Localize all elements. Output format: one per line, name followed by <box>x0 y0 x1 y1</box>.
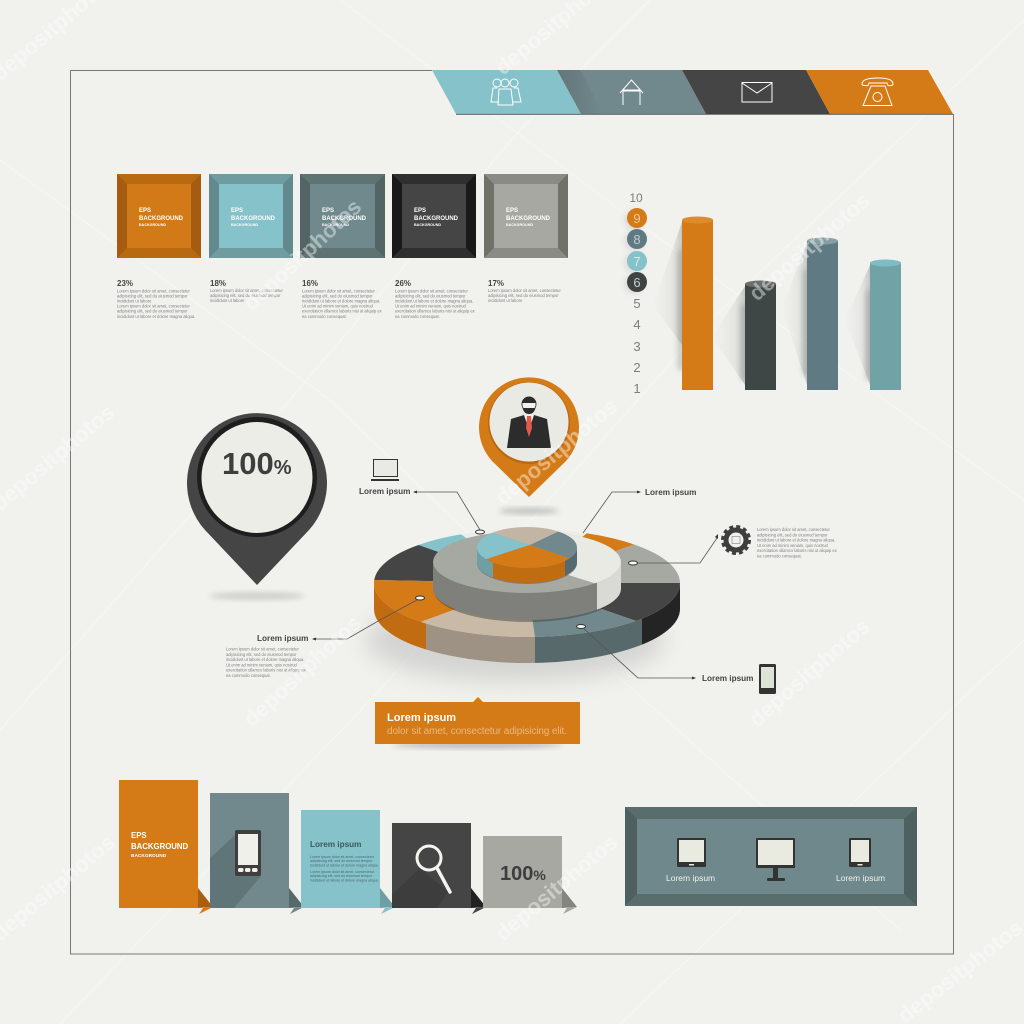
callout: gear: Ut enim ad minim veniam, quis nostrud <box>757 543 828 548</box>
box orange: BACKGROUND <box>139 223 166 227</box>
frame outline <box>70 70 954 954</box>
box orange: BACKGROUND <box>139 216 184 222</box>
callout: gear: adipisicing elit, sed do eiusmod tempor <box>757 532 828 537</box>
box orange <box>117 174 201 258</box>
box gray: BACKGROUND <box>506 223 533 227</box>
caption 26%: exercitation ullamco laboris nisi ut aliquip ex <box>395 308 475 314</box>
ribbon orange: EPS <box>131 831 147 840</box>
caption 16%: adipisicing elit, sed do eiusmod tempor <box>302 294 373 298</box>
axis scale: 10 <box>629 191 643 205</box>
caption 23% <box>117 279 195 319</box>
axis scale: 9 <box>633 211 641 226</box>
icon: magnifier <box>417 846 450 892</box>
box dark: BACKGROUND <box>414 223 441 227</box>
caption 16%: incididunt ut labore et dolore magna aliqua. <box>302 298 380 304</box>
bar teal <box>845 260 901 390</box>
caption 17%: incididunt ut labore <box>488 298 523 303</box>
middle ring <box>433 533 621 622</box>
box orange: EPS <box>139 208 151 214</box>
caption 23%: incididunt ut labore <box>117 298 152 304</box>
ribbon teal: adipisicing elit, sed do eiusmod tempor <box>310 874 373 878</box>
banner: Lorem ipsum <box>387 712 456 724</box>
caption 17%: 17% <box>488 279 504 288</box>
caption 17%: Lorem ipsum dolor sit amet, consectetur <box>488 288 561 293</box>
caption 18% <box>210 279 283 303</box>
ribbon teal: incididunt ut labore et dolore magna aliqua. <box>310 864 379 868</box>
pin: 100% <box>187 413 327 600</box>
box slate: EPS <box>322 208 334 214</box>
bar orange <box>653 216 713 390</box>
ribbon slate <box>210 793 304 914</box>
box slate <box>300 174 385 258</box>
callout: phone <box>583 628 776 694</box>
caption 23%: incididunt ut labore et dolore magna aliqua. <box>117 314 195 319</box>
caption 26%: 26% <box>395 279 411 288</box>
box teal <box>209 174 293 258</box>
callout dots <box>416 530 638 628</box>
box slate: BACKGROUND <box>322 223 349 227</box>
caption 26%: incididunt ut labore et dolore magna aliqua. <box>395 298 473 304</box>
bar dark <box>712 280 776 390</box>
caption 26% <box>395 279 475 319</box>
panel: percentage captions <box>117 279 561 319</box>
axis scale: 8 <box>633 232 641 247</box>
icon: smartphone <box>235 830 261 876</box>
watermarks: depositphotos <box>744 613 875 732</box>
axis scale: 1 <box>633 381 641 396</box>
pin: person <box>479 377 579 514</box>
bar slate <box>782 238 838 390</box>
caption 17% <box>488 279 561 303</box>
icon: portrait tablet <box>849 838 871 867</box>
caption 26%: adipisicing elit, sed do eiusmod tempor <box>395 294 466 298</box>
watermarks: depositphotos <box>490 393 622 510</box>
caption 23%: Lorem ipsum dolor sit amet, consectetur <box>117 288 190 294</box>
watermarks: depositphotos <box>238 610 366 732</box>
ribbon orange <box>119 780 213 914</box>
box dark <box>392 174 476 258</box>
axis scale: 6 <box>633 275 641 290</box>
axis scale: 3 <box>633 339 641 354</box>
caption 23%: adipisicing elit, sed do eiusmod tempor <box>117 294 188 298</box>
banner <box>375 697 580 748</box>
watermarks: depositphotos <box>238 194 366 316</box>
panel: bevel boxes <box>117 174 568 258</box>
ribbon teal: Lorem ipsum dolor sit amet, consectetur <box>310 870 375 874</box>
caption 18%: Lorem ipsum dolor sit amet, consectetur <box>210 288 283 293</box>
ribbon teal: Lorem ipsum dolor sit amet, consectetur <box>310 855 375 859</box>
panel: devices: Lorem ipsum <box>666 873 715 883</box>
ribbon gray: 100% <box>500 863 546 885</box>
panel: devices <box>625 807 917 906</box>
icon: landscape tablet <box>677 838 706 867</box>
icon: gear <box>722 526 750 554</box>
pie chart <box>362 527 680 689</box>
callout: left: exercitation ullamco laboris nisi ut aliquip ex <box>226 668 306 672</box>
callout: laptop: Lorem ipsum <box>359 487 410 496</box>
axis scale: 2 <box>633 360 641 375</box>
caption 18%: 18% <box>210 279 226 288</box>
caption 26%: Lorem ipsum dolor sit amet, consectetur <box>395 288 468 294</box>
icon: monitor <box>756 838 795 881</box>
callout: left <box>226 600 417 678</box>
callout: gear: incididunt ut labore et dolore magna aliqua. <box>757 538 835 543</box>
top pie <box>477 527 577 584</box>
box teal: EPS <box>231 208 243 214</box>
box teal: BACKGROUND <box>231 216 276 222</box>
caption 23%: 23% <box>117 279 133 288</box>
ribbon teal: incididunt ut labore et dolore magna aliqua. <box>310 878 379 882</box>
caption 16%: ea commodo consequat. <box>302 314 347 319</box>
panel: devices: Lorem ipsum <box>836 873 885 883</box>
caption 23%: adipisicing elit, sed do eiusmod tempor <box>117 308 188 314</box>
box slate: BACKGROUND <box>322 216 367 222</box>
base ring <box>374 533 680 663</box>
caption 16%: exercitation ullamco laboris nisi ut aliquip ex <box>302 308 382 314</box>
callout: left: Ut enim ad minim veniam, quis nostrud <box>226 662 297 667</box>
ribbon orange: BACKGROUND <box>131 842 189 851</box>
callout: gear: Lorem ipsum dolor sit amet, consectetur <box>757 527 830 532</box>
callout: top right: Lorem ipsum <box>645 488 696 497</box>
disc ground shadow <box>365 598 665 682</box>
icon: phone <box>759 664 776 694</box>
caption 26%: ea commodo consequat. <box>395 314 440 319</box>
callout: left: Lorem ipsum <box>257 634 308 643</box>
tab: mail <box>682 70 830 114</box>
box teal: BACKGROUND <box>231 223 258 227</box>
box gray <box>484 174 568 258</box>
tab: people <box>432 70 581 114</box>
caption 16%: Ut enim ad minim veniam, quis nostrud <box>302 304 373 308</box>
ribbon dark <box>392 823 486 914</box>
axis scale: 4 <box>633 317 641 332</box>
caption 18%: adipisicing elit, sed do eiusmod tempor <box>210 293 281 298</box>
caption 17%: adipisicing elit, sed do eiusmod tempor <box>488 293 559 298</box>
icon: businessman <box>507 396 551 448</box>
callout: gear: ea commodo consequat. <box>757 554 802 558</box>
box gray: EPS <box>506 208 518 214</box>
ribbon orange: BACKGROUND <box>131 853 167 859</box>
callout: left: incididunt ut labore et dolore magna aliqua. <box>226 657 304 662</box>
tab: home <box>557 70 706 114</box>
ribbon teal: adipisicing elit, sed do eiusmod tempor <box>310 859 373 863</box>
axis scale: 5 <box>633 296 641 311</box>
icon: laptop <box>371 460 399 481</box>
caption 16%: Lorem ipsum dolor sit amet, consectetur <box>302 288 375 294</box>
box dark: EPS <box>414 208 426 214</box>
caption 23%: Lorem ipsum dolor sit amet, consectetur <box>117 304 190 308</box>
axis scale: 7 <box>633 254 641 269</box>
callout: top right <box>583 488 696 533</box>
watermarks: depositphotos <box>490 829 622 946</box>
callout: left: Lorem ipsum dolor sit amet, consectetur <box>226 646 299 652</box>
callout: gear: exercitation ullamco laboris nisi ut aliquip ex <box>757 548 837 553</box>
axis scale <box>624 191 647 396</box>
callout: gear <box>638 526 837 563</box>
caption 16% <box>302 279 382 319</box>
ribbon teal: Lorem ipsum <box>310 840 361 849</box>
callout: left: ea commodo consequat. <box>226 673 271 678</box>
box gray: BACKGROUND <box>506 216 551 222</box>
caption 16%: 16% <box>302 279 318 288</box>
callout: laptop <box>359 460 480 530</box>
bar chart <box>624 191 901 396</box>
watermarks: depositphotos <box>744 187 875 306</box>
ribbon teal <box>301 810 395 914</box>
tab: telephone <box>806 70 953 114</box>
panel: ribbons <box>119 780 577 914</box>
pin: 100%: 100% <box>222 446 292 481</box>
box dark: BACKGROUND <box>414 216 459 222</box>
callout: left: adipisicing elit, sed do eiusmod tempor <box>226 652 297 657</box>
caption 26%: Ut enim ad minim veniam, quis nostrud <box>395 304 466 308</box>
callout: phone: Lorem ipsum <box>702 674 753 683</box>
banner: dolor sit amet, consectetur adipisicing elit. <box>387 726 567 737</box>
navigation tabs <box>432 70 953 114</box>
ribbon gray <box>483 836 577 914</box>
caption 18%: incididunt ut labore <box>210 298 245 303</box>
